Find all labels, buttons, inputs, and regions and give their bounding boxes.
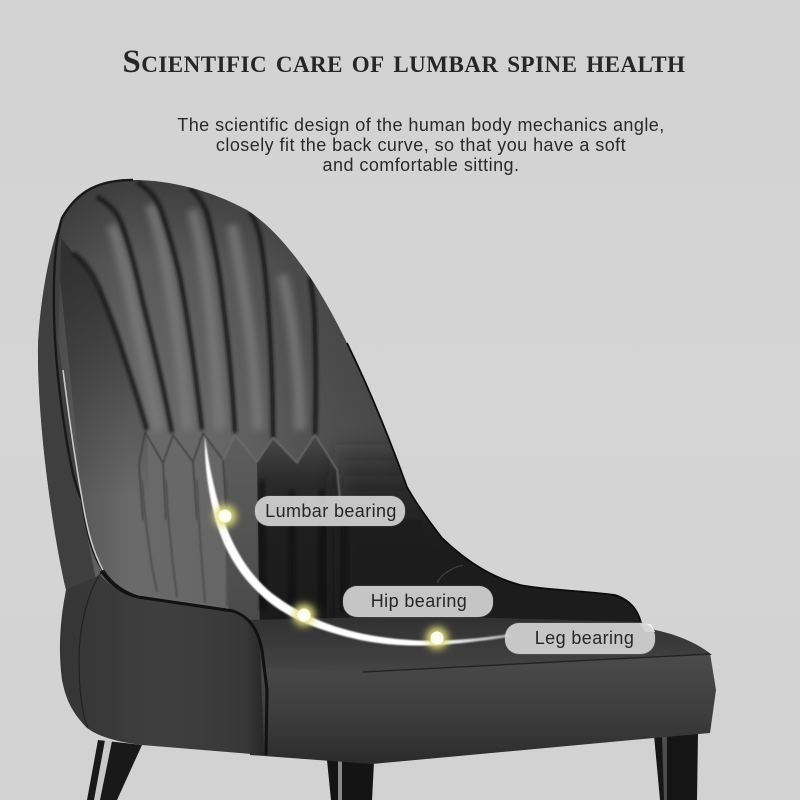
lower dark panel (257, 438, 344, 620)
label: hip bearing (343, 586, 493, 617)
bearing point: leg (426, 627, 448, 649)
seat cushion top (250, 616, 712, 673)
flute highlights (112, 205, 300, 430)
description text: The scientific design of the human body mechanics angle, (177, 115, 665, 135)
left panel shading (56, 233, 148, 462)
support curve with bearing points (205, 436, 510, 649)
legs (87, 732, 698, 800)
bearing point: hip (293, 604, 315, 626)
description text: and comfortable sitting. (323, 155, 519, 175)
cushion seam (437, 565, 463, 583)
label: hip bearing: Hip bearing (371, 591, 467, 611)
backrest (38, 180, 640, 622)
description text: closely fit the back curve, so that you have a soft (216, 135, 626, 155)
curve (205, 436, 510, 646)
label: lumbar bearing (255, 496, 405, 526)
description text (177, 115, 665, 175)
outer left band (38, 227, 96, 590)
label: leg bearing (505, 623, 655, 654)
label: leg bearing: Leg bearing (535, 628, 634, 648)
mid flute panel (224, 453, 260, 620)
backrest piping (54, 180, 641, 623)
upholstery seams (73, 182, 316, 438)
chair illustration (38, 178, 716, 800)
title: Scientific care of lumbar spine health (122, 44, 686, 80)
lower right shadow (330, 442, 640, 622)
lower flutes (142, 480, 227, 606)
glint at seat corner (640, 623, 655, 632)
stitched hexagon tips (139, 432, 227, 520)
seat cushion front (250, 653, 716, 764)
left armrest (60, 571, 267, 755)
bearing point: lumbar (214, 505, 236, 527)
label: lumbar bearing: Lumbar bearing (265, 501, 397, 521)
seat seam (363, 654, 710, 672)
